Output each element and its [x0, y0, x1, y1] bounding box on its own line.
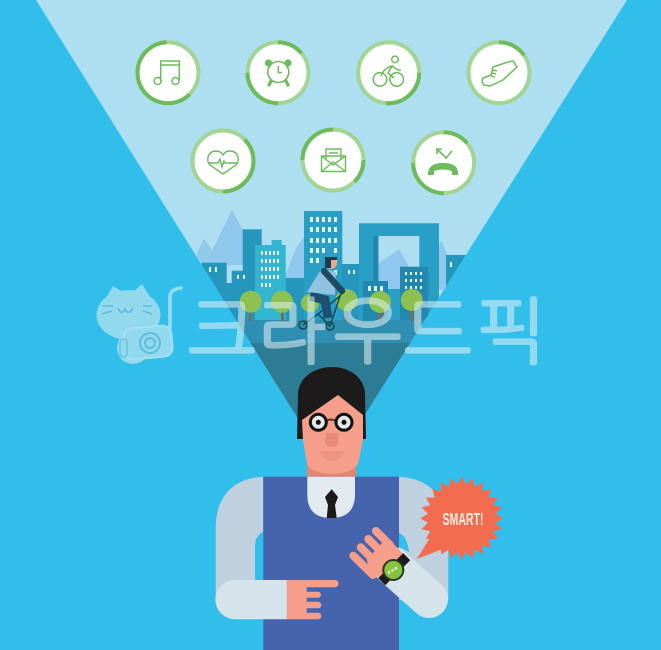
plaza — [250, 343, 410, 418]
neck — [307, 460, 356, 480]
icon: running shoe — [468, 42, 530, 103]
glasses — [310, 414, 352, 430]
mouth — [320, 451, 344, 461]
left upper sleeve — [216, 477, 263, 600]
pointing hand — [287, 580, 339, 619]
watch — [382, 557, 407, 582]
left forearm — [215, 580, 287, 619]
city scene — [196, 210, 466, 418]
icon: heart rate — [180, 118, 266, 204]
face — [302, 395, 363, 474]
vest — [263, 477, 399, 650]
nose — [325, 433, 338, 447]
person — [215, 367, 516, 650]
buildings — [202, 229, 466, 323]
watch hand — [353, 531, 403, 578]
light beam — [36, 0, 627, 470]
road — [236, 320, 424, 344]
icon: alarm clock — [248, 42, 308, 103]
trees — [240, 289, 423, 321]
windows — [209, 217, 452, 291]
speech burst — [417, 464, 516, 564]
burst label: SMART! — [442, 509, 484, 529]
hair — [297, 367, 366, 439]
tie — [325, 489, 338, 518]
cyclist — [299, 257, 343, 330]
right forearm — [392, 566, 429, 599]
icon: envelope — [302, 130, 364, 190]
right upper sleeve — [399, 477, 448, 600]
icon: music — [125, 30, 211, 116]
collar — [307, 477, 355, 518]
icon: phone — [413, 132, 474, 193]
icon: cyclist — [358, 42, 419, 103]
watermark text: 크라우드픽 — [188, 293, 546, 373]
watermark cat logo — [96, 284, 181, 364]
